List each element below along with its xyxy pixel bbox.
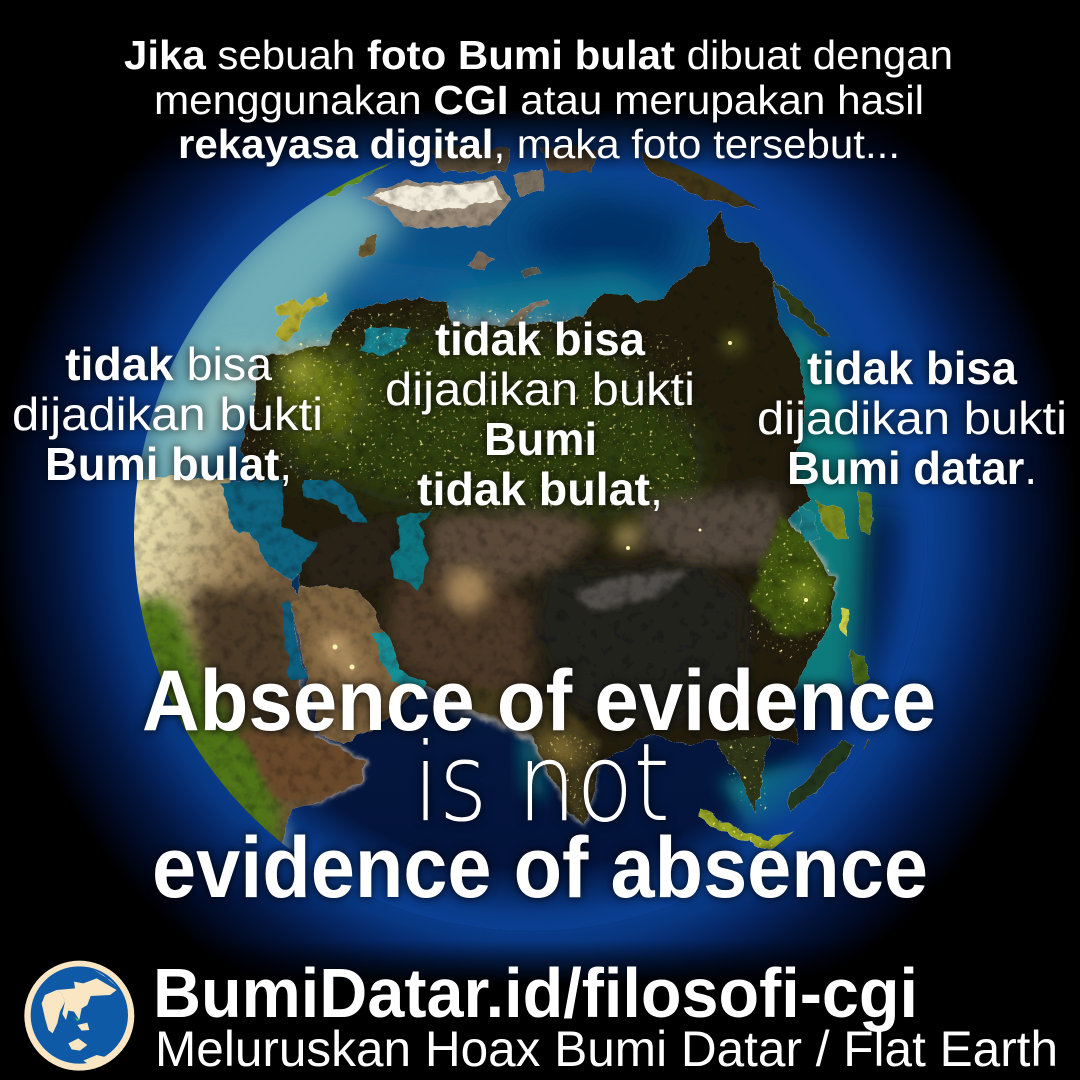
- land: Sumatra: [788, 740, 855, 810]
- land: far islands: [832, 740, 885, 816]
- centre statement: [385, 313, 695, 515]
- website address: BumiDatar.id/filosofi-cgi: [153, 954, 918, 1032]
- sea: Mediterranean: [222, 480, 317, 580]
- land: Korea: [815, 500, 848, 540]
- continents: [134, 145, 874, 851]
- land: Indochina: [715, 735, 770, 812]
- land: Tibet: [535, 565, 745, 725]
- land: Turkey and Caucasus: [300, 515, 395, 590]
- land: Kamchatka: [773, 280, 830, 337]
- land: Iran and Pakistan: [385, 575, 535, 710]
- land: Franz Josef: [520, 268, 543, 278]
- left statement: dijadikan bukti: [12, 388, 323, 440]
- sea: Baltic: [360, 327, 410, 357]
- slogan: evidence of absence: [152, 820, 928, 916]
- land: Tarim Basin: [572, 570, 690, 612]
- land: Arabia: [292, 585, 425, 745]
- land: Alaska and Chukotka: [638, 152, 760, 210]
- right statement: tidak bisa: [807, 342, 1017, 394]
- centre statement: Bumi: [484, 413, 597, 465]
- land: Svalbard: [467, 252, 497, 270]
- sea: Caspian: [390, 510, 433, 590]
- city lights: [240, 295, 870, 860]
- left statement: [12, 338, 323, 490]
- land: European plain: [270, 325, 705, 520]
- left statement: Bumi bulat,: [45, 438, 292, 490]
- sea: Yellow Sea gulf: [800, 505, 820, 545]
- logo: flat earth globe: [24, 961, 134, 1071]
- centre statement: tidak bisa: [435, 313, 645, 365]
- tagline: Meluruskan Hoax Bumi Datar / Flat Earth: [155, 1021, 1058, 1077]
- centre statement: tidak bulat,: [417, 463, 663, 515]
- sea: Black Sea: [303, 480, 367, 523]
- land: Mongolia: [640, 490, 780, 565]
- slogan: [142, 653, 936, 916]
- centre statement: dijadikan bukti: [385, 363, 695, 415]
- land: Greenland: [363, 177, 510, 228]
- land: Eurasia mass: [240, 213, 835, 825]
- atmosphere haze: [128, 170, 405, 510]
- left statement: tidak bisa: [65, 338, 272, 390]
- land: East China: [750, 515, 835, 638]
- heading line 3: rekayasa digital, maka foto tersebut...: [178, 121, 900, 167]
- land: British Isles: [273, 292, 328, 345]
- land: Africa: [120, 478, 365, 852]
- slogan: Absence of evidence: [142, 653, 936, 749]
- ocean: [128, 137, 930, 931]
- land: Taiwan: [840, 610, 849, 636]
- heading text: [124, 32, 953, 167]
- land: Canadian Arctic: [324, 160, 396, 197]
- right statement: Bumi datar.: [787, 442, 1037, 494]
- sea: Persian Gulf: [370, 632, 425, 690]
- land: Philippines: [850, 650, 870, 685]
- slogan: is not: [413, 721, 670, 846]
- right statement: dijadikan bukti: [757, 392, 1067, 444]
- land: India: [440, 680, 600, 825]
- land: Novaya Zemlya: [504, 300, 550, 327]
- land: Iceland: [357, 233, 378, 258]
- heading line 2: menggunakan CGI atau merupakan hasil: [154, 77, 924, 123]
- heading line 1: Jika sebuah foto Bumi bulat dibuat dengan: [124, 32, 953, 78]
- land: Sunda arc: [698, 808, 794, 850]
- land: Central Asia: [427, 510, 600, 597]
- land: Japan: [858, 490, 873, 535]
- sea: Red Sea: [282, 603, 307, 680]
- right statement: [757, 342, 1067, 494]
- globe: [120, 137, 940, 931]
